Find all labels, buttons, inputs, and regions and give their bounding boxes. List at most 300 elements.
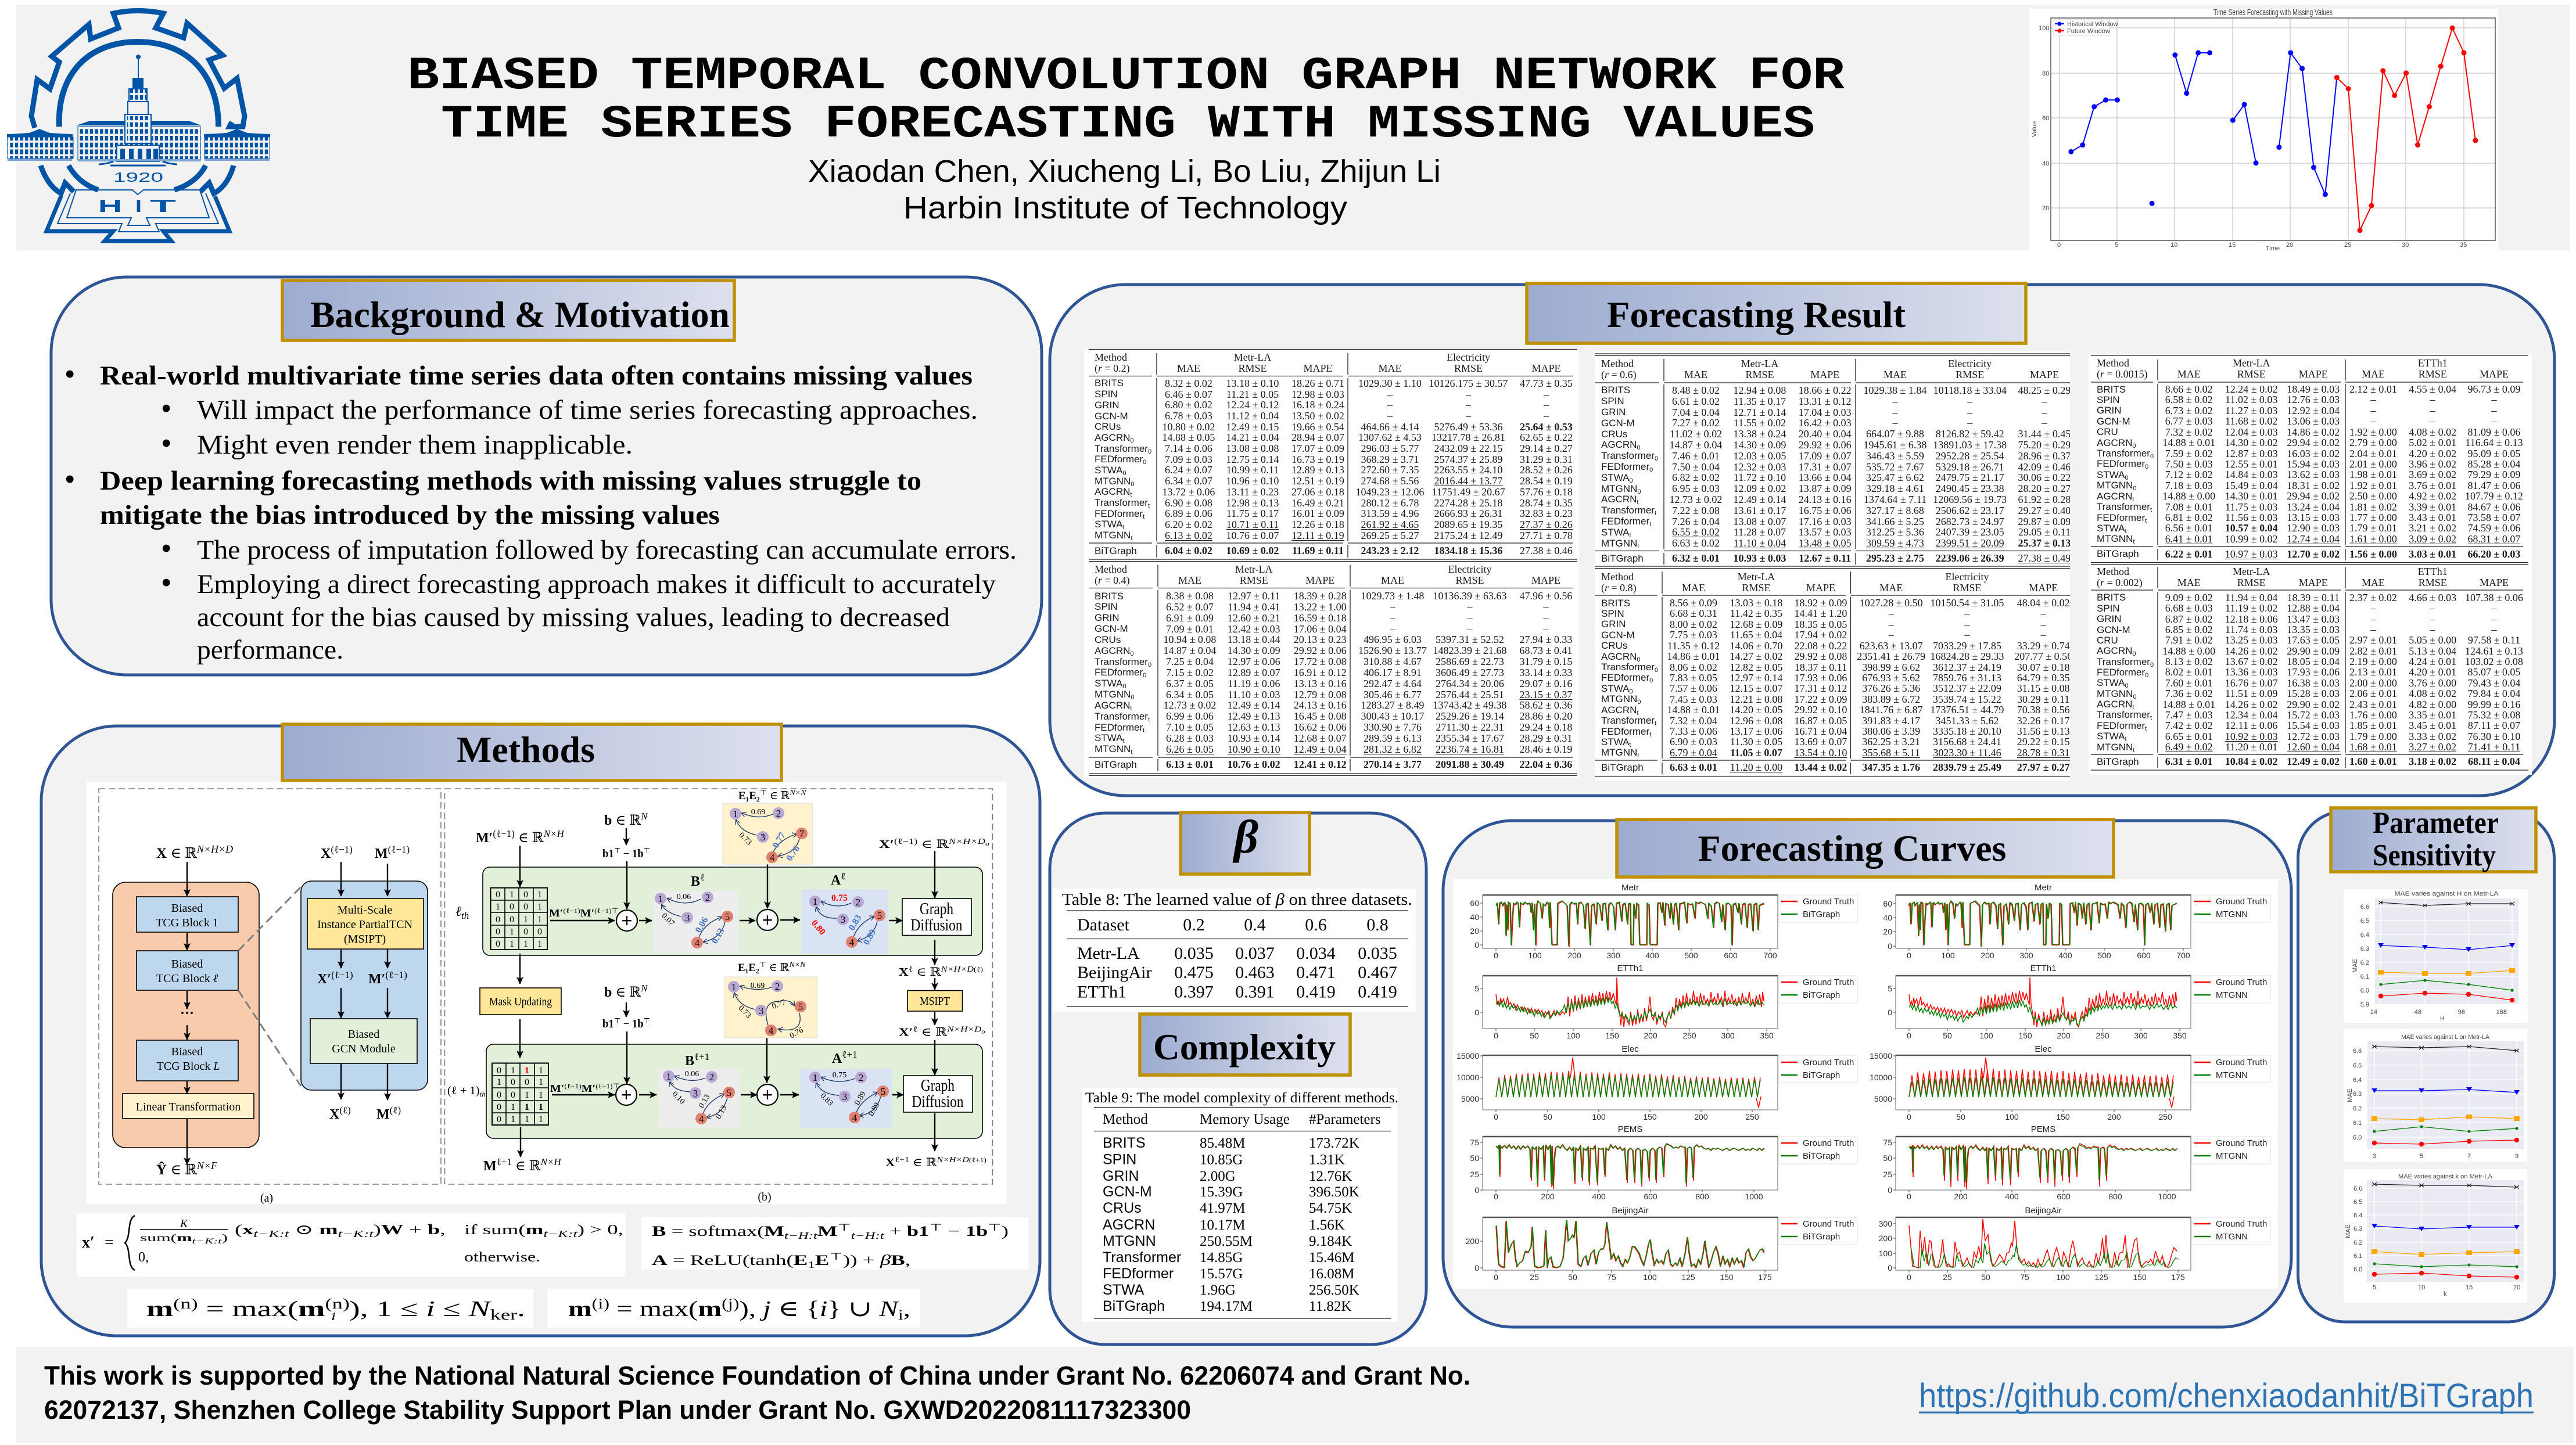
diagram a: overall architecture: (ℓ) — [339, 1105, 351, 1116]
table: r=0.0015 Metr-LA and ETTh1: 11.75 ± 0.03 — [2225, 501, 2277, 513]
text block: motivation bullets: • — [162, 393, 171, 423]
table: r=0.002 Metr-LA and ETTh1: 7.36 ± 0.02 — [2165, 688, 2213, 699]
title: BIASED TEMPORAL CONVOLUTION GRAPH NETWORK FOR — [407, 50, 1845, 103]
chart: Elec BiTGraph: 0 — [1494, 1112, 1498, 1122]
chart: Metr BiTGraph: 400 — [1645, 951, 1659, 960]
chart: Metr MTGNN: 500 — [2097, 951, 2111, 960]
chart: ETTh1 MTGNN: 100 — [1979, 1031, 1993, 1040]
table: r=0.002 Metr-LA and ETTh1: 2.43 ± 0.01 — [2349, 699, 2397, 710]
chart: MAE vs L: 6.3 — [2353, 1091, 2362, 1098]
panel: parameter sensitivity — [2298, 806, 2554, 1322]
table: r=0.6 Metr-LA and Electricity: 7.22 ± 0.08 — [1672, 505, 1720, 516]
text block: motivation bullets: performance. — [197, 635, 343, 665]
table: r=0.4 Metr-LA and Electricity: 27.94 ± 0.33 — [1520, 634, 1572, 645]
table: r=0.4 Metr-LA and Electricity: 7.09 ± 0.01 — [1166, 623, 1214, 635]
chart: MAE vs L: MAE varies against L on Metr-LA — [2401, 1034, 2490, 1041]
chart: ETTh1 BiTGraph: 0 — [1474, 1008, 1479, 1017]
chart: ETTh1 MTGNN: 200 — [2057, 1031, 2071, 1040]
table: r=0.4 Metr-LA and Electricity: 29.92 ± 0.06 — [1294, 645, 1347, 656]
equation: biased adjacency: t−H:t — [851, 1230, 885, 1241]
table 9: model complexity: 2.00G — [1200, 1169, 1236, 1184]
chart: ETTh1 BiTGraph: ETTh1 — [1617, 964, 1644, 973]
table: r=0.4 Metr-LA and Electricity: 28.46 ± 0.19 — [1520, 743, 1572, 755]
table: r=0.002 Metr-LA and ETTh1: 10.92 ± 0.03 — [2225, 731, 2278, 742]
mask matrix bottom: 1 — [525, 1066, 529, 1076]
table: r=0.8 Metr-LA and Electricity: AGCRNt — [1601, 704, 1638, 717]
table: r=0.8 Metr-LA and Electricity: STWA0 — [1601, 683, 1633, 695]
table: r=0.2 Metr-LA and Electricity: 47.73 ± 0.35 — [1520, 378, 1573, 389]
table 9: model complexity: 396.50K — [1309, 1184, 1359, 1200]
chart: MAE vs H — [2344, 889, 2528, 1023]
table: r=0.6 Metr-LA and Electricity: 7.27 ± 0.02 — [1672, 417, 1720, 429]
table: r=0.002 Metr-LA and ETTh1: ETTh1 — [2418, 566, 2448, 577]
table 9: model complexity: 194.17M — [1200, 1299, 1253, 1314]
diagram a: overall architecture: (ℓ−1) — [331, 844, 353, 855]
table: r=0.002 Metr-LA and ETTh1: 7.91 ± 0.02 — [2165, 634, 2213, 646]
chart: Elec BiTGraph: 10000 — [1456, 1073, 1479, 1082]
heading: beta — [1181, 810, 1309, 874]
table: r=0.8 Metr-LA and Electricity: 16.87 ± 0.05 — [1795, 715, 1847, 727]
table: r=0.6 Metr-LA and Electricity: 17.16 ± 0.03 — [1799, 516, 1852, 527]
table: r=0.8 Metr-LA and Electricity: 1027.28 ± 0.50 — [1860, 597, 1923, 609]
table: r=0.4 Metr-LA and Electricity: Metr-LA — [1235, 563, 1273, 575]
table: r=0.6 Metr-LA and Electricity: 13.87 ± 0.09 — [1799, 483, 1852, 494]
table: r=0.0015 Metr-LA and ETTh1: STWAt — [2097, 523, 2127, 535]
chart: BeijingAir MTGNN: BeijingAir — [2025, 1206, 2062, 1216]
table: r=0.0015 Metr-LA and ETTh1: Method — [2097, 358, 2129, 369]
table: r=0.0015 Metr-LA and ETTh1: MAE — [2362, 368, 2385, 380]
table 9: model complexity: 11.82K — [1309, 1299, 1351, 1314]
table: r=0.0015 Metr-LA and ETTh1: 15.94 ± 0.03 — [2287, 458, 2340, 470]
table: r=0.2 Metr-LA and Electricity: 1307.62 ± 4.53 — [1358, 432, 1422, 443]
diagram b: biased GCN module detail: 1b — [632, 847, 644, 860]
table: r=0.6 Metr-LA and Electricity: 17.09 ± 0.07 — [1799, 450, 1852, 462]
table: r=0.4 Metr-LA and Electricity: 6.52 ± 0.07 — [1166, 601, 1214, 613]
table: r=0.002 Metr-LA and ETTh1: 4.08 ± 0.02 — [2409, 688, 2456, 699]
table: r=0.0015 Metr-LA and ETTh1: 7.18 ± 0.03 — [2165, 480, 2213, 491]
table: r=0.6 Metr-LA and Electricity: 12.03 ± 0.05 — [1734, 450, 1786, 462]
diagram a: overall architecture: N×F — [196, 1160, 218, 1171]
table: r=0.4 Metr-LA and Electricity: 2236.74 ± 16.81 — [1436, 743, 1504, 755]
equation: biased adjacency: b1 — [907, 1224, 929, 1239]
table: r=0.6 Metr-LA and Electricity: 2682.73 ± 24.97 — [1936, 516, 2004, 527]
chart: BeijingAir MTGNN: 150 — [2133, 1273, 2147, 1282]
table: r=0.002 Metr-LA and ETTh1: 13.35 ± 0.03 — [2287, 624, 2340, 635]
graph: E1E2 bottom: 0.69 — [751, 982, 765, 990]
heading: background and motivation: Background & Motivation — [310, 294, 730, 335]
table: r=0.2 Metr-LA and Electricity: 5276.49 ± 53.36 — [1434, 421, 1502, 433]
graph: B bottom: 0.06 — [685, 1070, 699, 1079]
table: r=0.002 Metr-LA and ETTh1: 3.76 ± 0.00 — [2409, 677, 2456, 689]
table 8: learned beta: 0.8 — [1366, 915, 1389, 934]
table: r=0.2 Metr-LA and Electricity: Method — [1095, 351, 1127, 362]
table: r=0.6 Metr-LA and Electricity: 75.20 ± 0.29 — [2018, 439, 2070, 451]
table: r=0.2 Metr-LA and Electricity: 7.09 ± 0.03 — [1165, 454, 1212, 465]
table 9: model complexity: SPIN — [1103, 1151, 1136, 1167]
diagram b: biased GCN module detail: A — [831, 873, 841, 888]
chart: MAE vs k: MAE — [2345, 1224, 2352, 1238]
table: r=0.6 Metr-LA and Electricity: MAE — [1684, 369, 1707, 380]
chart: PEMS BiTGraph: 600 — [1644, 1192, 1657, 1201]
table: r=0.4 Metr-LA and Electricity: AGCRN0 — [1095, 645, 1134, 657]
diagram b: biased GCN module detail: (ℓ−1) — [564, 1082, 582, 1090]
table: r=0.0015 Metr-LA and ETTh1: 12.90 ± 0.03 — [2287, 522, 2340, 534]
table 9: model complexity: AGCRN — [1103, 1217, 1155, 1233]
equation: biased adjacency — [641, 1217, 1028, 1270]
table: r=0.4 Metr-LA and Electricity: 305.46 ± 6.77 — [1364, 689, 1422, 700]
chart: ETTh1 BiTGraph: 150 — [1605, 1031, 1619, 1040]
table: r=0.4 Metr-LA and Electricity: 6.26 ± 0.05 — [1166, 743, 1214, 755]
table: r=0.0015 Metr-LA and ETTh1: 6.56 ± 0.01 — [2165, 522, 2213, 534]
table: r=0.8 Metr-LA and Electricity: 3612.37 ± 24.19 — [1933, 662, 2001, 673]
table: r=0.002 Metr-LA and ETTh1: – — [2430, 624, 2435, 635]
equation: biased adjacency: B = softmax( M — [652, 1224, 778, 1239]
table: r=0.002 Metr-LA and ETTh1: 75.32 ± 0.08 — [2468, 709, 2520, 721]
diagram b: biased GCN module detail: ℓ+1 — [842, 1049, 858, 1060]
table: r=0.8 Metr-LA and Electricity: – — [1889, 608, 1894, 619]
table: r=0.8 Metr-LA and Electricity: 380.06 ± 3.39 — [1862, 725, 1920, 737]
table: r=0.0015 Metr-LA and ETTh1: 7.32 ± 0.02 — [2165, 426, 2213, 438]
table: r=0.6 Metr-LA and Electricity: 14.87 ± 0.04 — [1670, 439, 1722, 451]
diagram b: biased GCN module detail: (ℓ + 1) — [447, 1084, 479, 1097]
table: r=0.002 Metr-LA and ETTh1: 4.82 ± 0.00 — [2409, 699, 2456, 710]
diagram a: overall architecture: TCG Block L — [157, 1060, 220, 1073]
table: r=0.8 Metr-LA and Electricity: BRITS — [1601, 597, 1630, 609]
table: r=0.0015 Metr-LA and ETTh1 — [2097, 358, 2523, 559]
heading: forecasting result: Forecasting Result — [1607, 294, 1906, 335]
diagram a: overall architecture — [99, 789, 441, 1205]
table 9: model complexity: 14.85G — [1200, 1250, 1243, 1266]
acknowledgement text — [44, 1361, 1470, 1425]
equation: neighbor mask update: = max( — [609, 1297, 698, 1321]
chart: Metr BiTGraph: 200 — [1567, 951, 1581, 960]
table: r=0.4 Metr-LA and Electricity: 2576.44 ± 25.51 — [1436, 689, 1504, 700]
graph: A top: 0.80 — [809, 918, 827, 937]
table: r=0.0015 Metr-LA and ETTh1: MAE — [2177, 368, 2201, 380]
table: r=0.2 Metr-LA and Electricity: 2666.93 ± 26.31 — [1434, 508, 1502, 519]
table: r=0.002 Metr-LA and ETTh1: AGCRNt — [2097, 699, 2134, 711]
chart: Metr MTGNN: 300 — [2019, 951, 2033, 960]
table: r=0.4 Metr-LA and Electricity: FEDformert — [1095, 722, 1145, 734]
equation: kernel mask update: . — [517, 1297, 525, 1321]
diagram b: biased GCN module detail: M′ — [580, 907, 594, 919]
table: r=0.002 Metr-LA and ETTh1: 16.38 ± 0.03 — [2287, 677, 2340, 689]
chart: Metr BiTGraph: 0 — [1494, 951, 1498, 960]
chart: MAE vs L: 9 — [2515, 1153, 2518, 1160]
diagram a: overall architecture: (ℓ−1) — [331, 969, 353, 980]
table: r=0.8 Metr-LA and Electricity: 676.93 ± 5.62 — [1862, 672, 1920, 684]
equation: kernel mask update: = max( — [198, 1297, 298, 1321]
repository link: https://github.com/chenxiaodanhit/BiTGraph — [1919, 1377, 2534, 1415]
table: r=0.2 Metr-LA and Electricity: 19.66 ± 0.54 — [1291, 421, 1344, 433]
table: r=0.0015 Metr-LA and ETTh1: 14.30 ± 0.01 — [2225, 490, 2278, 502]
table: r=0.0015 Metr-LA and ETTh1: 96.73 ± 0.09 — [2468, 383, 2520, 395]
title — [407, 50, 1845, 151]
table 8: learned beta: 0.419 — [1296, 983, 1336, 1001]
table: r=0.0015 Metr-LA and ETTh1: 13.15 ± 0.03 — [2287, 512, 2340, 523]
diagram b: biased GCN module detail — [445, 788, 992, 1203]
table: r=0.0015 Metr-LA and ETTh1: 11.68 ± 0.02 — [2225, 415, 2277, 427]
table: r=0.6 Metr-LA and Electricity: 13.08 ± 0.07 — [1734, 516, 1786, 527]
table: r=0.8 Metr-LA and Electricity: 17.93 ± 0.06 — [1795, 672, 1847, 684]
table: r=0.4 Metr-LA and Electricity: 13.18 ± 0.44 — [1228, 634, 1280, 645]
table: r=0.4 Metr-LA and Electricity: STWA0 — [1095, 678, 1126, 690]
table: r=0.8 Metr-LA and Electricity: 8.00 ± 0.02 — [1670, 619, 1717, 630]
equation: masked convolution: m — [319, 1223, 338, 1238]
diagram b: biased GCN module detail: X — [899, 966, 909, 979]
affiliation: Harbin Institute of Technology — [903, 190, 1347, 225]
diagram a: overall architecture: ··· — [180, 1006, 194, 1021]
table: r=0.6 Metr-LA and Electricity: 29.87 ± 0.09 — [2018, 516, 2070, 527]
chart: Elec MTGNN: 0 — [1907, 1112, 1911, 1122]
table: r=0.6 Metr-LA and Electricity: 6.55 ± 0.02 — [1672, 526, 1720, 538]
diagram b: biased GCN module detail: b ∈ ℝ — [604, 985, 641, 1000]
table: r=0.0015 Metr-LA and ETTh1: 6.41 ± 0.01 — [2165, 533, 2213, 545]
diagram b: biased GCN module detail: (ℓ+1) — [969, 1156, 986, 1164]
table: r=0.2 Metr-LA and Electricity: 12.26 ± 0.18 — [1291, 519, 1344, 530]
table: r=0.002 Metr-LA and ETTh1: MAPE — [2299, 577, 2328, 588]
diagram b: biased GCN module detail: ⊤ — [614, 1016, 620, 1025]
table: r=0.8 Metr-LA and Electricity: 8.06 ± 0.02 — [1670, 662, 1717, 673]
table: r=0.0015 Metr-LA and ETTh1: 116.64 ± 0.13 — [2465, 437, 2523, 448]
table: r=0.2 Metr-LA and Electricity: FEDformer0 — [1095, 454, 1146, 466]
table: r=0.4 Metr-LA and Electricity: 6.13 ± 0.01 — [1166, 759, 1214, 770]
diagram a: overall architecture: (MSIPT) — [344, 933, 386, 946]
table: r=0.8 Metr-LA and Electricity: 12.97 ± 0.14 — [1730, 672, 1782, 684]
table: r=0.8 Metr-LA and Electricity: 3512.37 ± 22.09 — [1933, 682, 2001, 694]
chart: time series forecasting with missing values: Historical Window — [2067, 21, 2118, 28]
chart: Elec MTGNN: 250 — [2158, 1112, 2172, 1122]
chart: MAE vs H: 168 — [2496, 1009, 2507, 1016]
chart: time series forecasting with missing values: 100 — [2039, 25, 2049, 32]
table: r=0.2 Metr-LA and Electricity: – — [1466, 389, 1471, 400]
heading: forecasting curves — [1617, 819, 2114, 877]
table: r=0.2 Metr-LA and Electricity: 13.50 ± 0.02 — [1291, 410, 1344, 422]
table: r=0.002 Metr-LA and ETTh1: 8.02 ± 0.01 — [2165, 666, 2213, 678]
table 9: model complexity: 54.75K — [1309, 1200, 1352, 1216]
heading: methods: Methods — [457, 729, 595, 770]
diagram b: biased GCN module detail: ℓ+1 — [694, 1051, 709, 1062]
table: r=0.6 Metr-LA and Electricity: 11.02 ± 0.02 — [1670, 428, 1722, 440]
table: r=0.0015 Metr-LA and ETTh1: AGCRN0 — [2097, 437, 2136, 450]
table: r=0.2 Metr-LA and Electricity: 12.24 ± 0.12 — [1226, 399, 1279, 411]
table: r=0.4 Metr-LA and Electricity: 2586.69 ± 22.73 — [1436, 656, 1504, 667]
table: r=0.002 Metr-LA and ETTh1: 12.18 ± 0.06 — [2225, 613, 2278, 625]
chart: Metr BiTGraph — [1470, 883, 1857, 960]
table: r=0.002 Metr-LA and ETTh1: 1.76 ± 0.00 — [2349, 709, 2397, 721]
equation: biased adjacency: ⊤ — [830, 1251, 843, 1262]
chart: Metr MTGNN: 600 — [2137, 951, 2151, 960]
diagram a: overall architecture: TCG Block 1 — [156, 916, 218, 929]
table: r=0.8 Metr-LA and Electricity: 29.92 ± 0.08 — [1795, 650, 1847, 662]
table: r=0.8 Metr-LA and Electricity: 623.63 ± 13.07 — [1860, 640, 1923, 652]
table: r=0.4 Metr-LA and Electricity: RMSE — [1455, 574, 1484, 586]
diagram b: biased GCN module detail: b1 — [602, 847, 614, 860]
table: r=0.4 Metr-LA and Electricity: 406.17 ± 8.91 — [1364, 667, 1422, 678]
table: r=0.0015 Metr-LA and ETTh1: 14.30 ± 0.02 — [2225, 437, 2278, 448]
table: r=0.2 Metr-LA and Electricity: Metr-LA — [1234, 351, 1271, 362]
table: r=0.6 Metr-LA and Electricity: 346.43 ± 5.59 — [1866, 450, 1924, 462]
table: r=0.0015 Metr-LA and ETTh1: 12.04 ± 0.03 — [2225, 426, 2278, 438]
table: r=0.002 Metr-LA and ETTh1: 18.39 ± 0.11 — [2287, 592, 2340, 603]
table: r=0.4 Metr-LA and Electricity: 2355.34 ± 17.67 — [1436, 732, 1504, 744]
table: r=0.4 Metr-LA and Electricity: 16.91 ± 0.12 — [1294, 667, 1347, 678]
table 9: model complexity: 10.17M — [1200, 1217, 1245, 1233]
heading: background and motivation — [282, 281, 734, 340]
diagram a: overall architecture: TCG Block ℓ — [156, 972, 218, 985]
chart: Metr MTGNN: 40 — [1883, 913, 1892, 922]
equation: biased adjacency: A = ReLU(tanh( E — [652, 1253, 803, 1268]
heading: parameter sensitivity — [2331, 806, 2536, 872]
table: r=0.8 Metr-LA and Electricity: GCN-M — [1601, 630, 1635, 641]
chart: time series forecasting with missing values: Time — [2266, 245, 2280, 252]
table: r=0.4 Metr-LA and Electricity: 281.32 ± 6.82 — [1364, 743, 1422, 755]
table: r=0.2 Metr-LA and Electricity: MAPE — [1303, 362, 1333, 374]
table: r=0.2 Metr-LA and Electricity: 6.46 ± 0.07 — [1165, 389, 1212, 400]
table: r=0.6 Metr-LA and Electricity: 8126.82 ± 59.42 — [1936, 428, 2004, 440]
table: r=0.2 Metr-LA and Electricity: 10.76 ± 0.07 — [1226, 530, 1279, 541]
table: r=0.4 Metr-LA and Electricity: 12.97 ± 0.06 — [1228, 656, 1280, 667]
logo text HIT: H — [98, 196, 122, 216]
chart: MAE vs L: 7 — [2467, 1153, 2471, 1160]
text block: motivation bullets: Might even render them inapplicable. — [197, 430, 633, 460]
diagram b: biased GCN module detail: ℓ — [909, 965, 913, 974]
equation: biased adjacency: 1b — [966, 1224, 988, 1239]
chart: MAE vs k — [2344, 1169, 2527, 1303]
chart: ETTh1 MTGNN — [1888, 964, 2270, 1040]
table: r=0.2 Metr-LA and Electricity: RMSE — [1454, 362, 1483, 374]
table: r=0.002 Metr-LA and ETTh1: 76.30 ± 0.10 — [2468, 731, 2520, 742]
table: r=0.6 Metr-LA and Electricity: BiTGraph — [1601, 553, 1644, 564]
diagram b: biased GCN module detail: ∈ ℝ — [909, 1156, 937, 1169]
graph: A bottom: 0.75 — [833, 1071, 846, 1080]
table: r=0.8 Metr-LA and Electricity: RMSE — [1953, 582, 1982, 594]
chart: ETTh1 MTGNN: 300 — [2134, 1031, 2148, 1040]
table: r=0.0015 Metr-LA and ETTh1: Transformert — [2097, 501, 2152, 513]
table: r=0.2 Metr-LA and Electricity: – — [1544, 410, 1549, 422]
chart: PEMS MTGNN: 0 — [1888, 1185, 1892, 1195]
table: r=0.0015 Metr-LA and ETTh1: GCN-M — [2097, 416, 2130, 427]
chart: time series forecasting with missing values: 30 — [2402, 242, 2409, 249]
table: r=0.002 Metr-LA and ETTh1: 9.09 ± 0.02 — [2165, 592, 2213, 603]
chart: MAE vs H: 6.6 — [2360, 904, 2369, 911]
equation: biased adjacency: + — [884, 1224, 907, 1239]
text block: motivation bullets: mitigate the bias introduced by the missing values — [100, 500, 720, 530]
table: r=0.0015 Metr-LA and ETTh1: 14.88 ± 0.01 — [2162, 437, 2215, 448]
diagram b: biased GCN module detail: + — [621, 1084, 632, 1105]
table: r=0.0015 Metr-LA and ETTh1: 4.20 ± 0.02 — [2409, 448, 2456, 459]
table: r=0.002 Metr-LA and ETTh1: GRIN — [2097, 613, 2122, 624]
table: r=0.002 Metr-LA and ETTh1: 107.38 ± 0.06 — [2465, 592, 2523, 603]
table: r=0.4 Metr-LA and Electricity: 310.88 ± 4.67 — [1364, 656, 1422, 667]
table: r=0.4 Metr-LA and Electricity: 13.13 ± 0.16 — [1294, 678, 1347, 689]
table 8: learned beta: 0.035 — [1174, 944, 1214, 963]
table: r=0.6 Metr-LA and Electricity: MAPE — [2030, 369, 2059, 380]
table: r=0.0015 Metr-LA and ETTh1: 14.88 ± 0.00 — [2162, 490, 2215, 502]
table: r=0.0015 Metr-LA and ETTh1: MAPE — [2480, 368, 2509, 380]
diagram b: biased GCN module detail: (b) — [758, 1191, 772, 1203]
chart: ETTh1 MTGNN: 0 — [1888, 1008, 1892, 1017]
chart: PEMS MTGNN: 25 — [1883, 1170, 1892, 1179]
table: r=0.8 Metr-LA and Electricity: Transformert — [1601, 715, 1656, 727]
table: r=0.4 Metr-LA and Electricity: GCN-M — [1095, 623, 1128, 634]
chart: MAE vs H: 96 — [2458, 1009, 2465, 1016]
table: r=0.6 Metr-LA and Electricity: – — [1893, 396, 1897, 407]
table: r=0.8 Metr-LA and Electricity: 7033.29 ± 17.85 — [1933, 640, 2001, 652]
table: r=0.4 Metr-LA and Electricity: BiTGraph — [1095, 759, 1137, 770]
chart: Metr MTGNN: 400 — [2058, 951, 2072, 960]
table 9: model complexity: 15.46M — [1309, 1250, 1354, 1266]
graph: E1E2 bottom: 12345 — [731, 981, 803, 1036]
table: r=0.8 Metr-LA and Electricity: 28.78 ± 0.31 — [2017, 747, 2070, 759]
graph: A bottom: 0.89 — [867, 1101, 882, 1118]
chart: Metr MTGNN: Metr — [2035, 883, 2052, 893]
table: r=0.0015 Metr-LA and ETTh1: 81.09 ± 0.06 — [2468, 426, 2520, 438]
table: r=0.0015 Metr-LA and ETTh1: BRITS — [2097, 383, 2126, 395]
table: r=0.8 Metr-LA and Electricity: 14.06 ± 0.70 — [1730, 640, 1782, 652]
table: r=0.0015 Metr-LA and ETTh1: 8.66 ± 0.02 — [2165, 383, 2213, 395]
table: r=0.6 Metr-LA and Electricity: 12.71 ± 0.14 — [1734, 407, 1786, 418]
table: r=0.8 Metr-LA and Electricity: 31.56 ± 0.13 — [2017, 725, 2070, 737]
chart: BeijingAir MTGNN: 100 — [2056, 1273, 2070, 1282]
table: r=0.002 Metr-LA and ETTh1: – — [2430, 602, 2435, 614]
equation: masked convolution — [77, 1213, 625, 1277]
table: r=0.002 Metr-LA and ETTh1: 2.06 ± 0.01 — [2349, 688, 2397, 699]
diagram b: biased GCN module detail: th — [461, 910, 469, 921]
table: r=0.002 Metr-LA and ETTh1: 15.72 ± 0.03 — [2287, 709, 2340, 721]
table: r=0.6 Metr-LA and Electricity: FEDformert — [1601, 516, 1651, 528]
table: r=0.002 Metr-LA and ETTh1: 87.11 ± 0.07 — [2468, 720, 2520, 731]
table: r=0.4 Metr-LA and Electricity: 29.24 ± 0.18 — [1520, 721, 1572, 733]
equation: masked convolution: if sum( m — [464, 1223, 537, 1238]
table: r=0.0015 Metr-LA and ETTh1: 2.04 ± 0.01 — [2349, 448, 2397, 459]
table: r=0.002 Metr-LA and ETTh1: MAPE — [2480, 577, 2509, 588]
table: r=0.0015 Metr-LA and ETTh1: MTGNNt — [2097, 533, 2134, 545]
table: r=0.4 Metr-LA and Electricity: 12.73 ± 0.02 — [1164, 699, 1216, 711]
table: r=0.4 Metr-LA and Electricity: BRITS — [1095, 591, 1124, 602]
text block: motivation bullets — [65, 358, 1017, 665]
table: r=0.002 Metr-LA and ETTh1: MAE — [2177, 577, 2201, 588]
table: r=0.8 Metr-LA and Electricity: 12.15 ± 0.07 — [1730, 682, 1782, 694]
table 8: learned beta: Metr-LA — [1077, 944, 1140, 963]
graph: A top: 0.83 — [847, 913, 863, 932]
table: r=0.0015 Metr-LA and ETTh1: FEDformer0 — [2097, 458, 2148, 470]
table: r=0.4 Metr-LA and Electricity: – — [1390, 623, 1395, 635]
chart: ETTh1 BiTGraph: 350 — [1760, 1031, 1774, 1040]
table: r=0.0015 Metr-LA and ETTh1: 84.67 ± 0.06 — [2468, 501, 2520, 513]
table 9: model complexity: 256.50K — [1309, 1282, 1359, 1298]
chart: ETTh1 MTGNN: MTGNN — [2216, 990, 2248, 1000]
chart: Metr MTGNN: 60 — [1883, 899, 1892, 908]
table: r=0.2 Metr-LA and Electricity: 269.25 ± 5.27 — [1361, 530, 1419, 541]
chart: BeijingAir BiTGraph: 100 — [1643, 1273, 1657, 1282]
diagram b: biased GCN module detail: B — [685, 1054, 694, 1069]
table backgrounds and rules — [1084, 349, 2532, 781]
table: r=0.0015 Metr-LA and ETTh1: 2.79 ± 0.00 — [2349, 437, 2397, 448]
table 8: learned beta: 0.2 — [1183, 915, 1205, 934]
chart: MAE vs H: H — [2440, 1015, 2445, 1022]
table: r=0.2 Metr-LA and Electricity: AGCRNt — [1095, 486, 1132, 498]
table: r=0.002 Metr-LA and ETTh1: MTGNN0 — [2097, 688, 2136, 700]
table: r=0.2 Metr-LA and Electricity: 57.76 ± 0.18 — [1520, 486, 1573, 498]
diagram b: biased GCN module detail: B — [691, 874, 700, 889]
table 8: learned beta: 0.475 — [1174, 963, 1214, 982]
graph: A top: 0.75 — [831, 893, 848, 903]
panel: beta and complexity — [1050, 810, 1426, 1345]
equation: masked convolution: (x — [235, 1223, 249, 1238]
table 9: model complexity: STWA — [1103, 1282, 1145, 1298]
table: r=0.2 Metr-LA and Electricity — [1095, 351, 1573, 556]
